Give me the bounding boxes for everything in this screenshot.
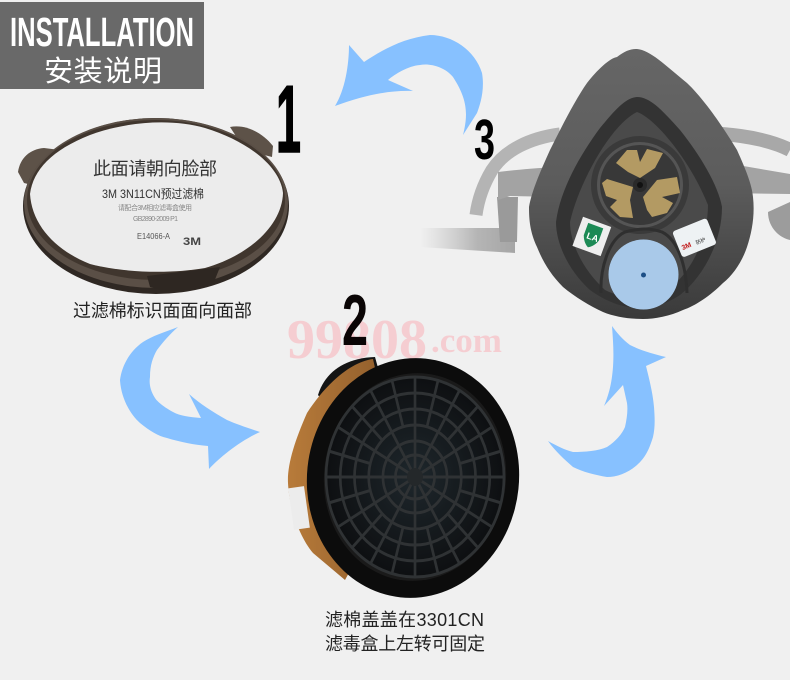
caption: step 2: 滤棉盖盖在3301CN xyxy=(325,610,484,630)
pad printing: 3M 3N11CN预过滤棉 xyxy=(102,187,204,201)
label on cartridge side xyxy=(288,486,310,530)
step number 2: 2 xyxy=(342,281,368,361)
caption: step 2: 滤毒盒上左转可固定 xyxy=(325,634,485,654)
valve frame lines xyxy=(601,229,687,293)
half-face respirator xyxy=(420,49,790,319)
step number 3: 3 xyxy=(474,108,495,172)
3M product label: 3M xyxy=(681,242,693,252)
caption: step 2 xyxy=(325,610,485,654)
cartridge xyxy=(288,348,531,608)
cartridge body xyxy=(288,359,400,580)
cartridge port with tan filter xyxy=(591,136,689,234)
LA safety label: LA xyxy=(585,231,600,244)
white pad xyxy=(30,122,283,272)
inner teardrop plate xyxy=(556,97,722,308)
watermark: .com xyxy=(431,321,502,360)
title block: 安装说明 xyxy=(44,55,162,88)
pad printing xyxy=(93,159,217,248)
LA safety label xyxy=(572,217,611,256)
disc rim xyxy=(23,118,289,294)
watermark xyxy=(287,309,502,371)
arrow: step 1 to step 2 xyxy=(120,327,260,469)
pad printing: 此面请朝向脸部 xyxy=(93,159,217,179)
grid mesh xyxy=(326,377,504,577)
title block: INSTALLATION xyxy=(10,9,194,55)
arrow: step 2 to step 3 xyxy=(548,326,666,477)
arrow: step 3 to step 1 xyxy=(335,35,483,135)
pad printing: 请配合3M相应滤毒盒使用 xyxy=(118,203,192,212)
disc tabs xyxy=(18,126,273,187)
pad printing: 3M xyxy=(183,236,201,248)
infographic canvas: 1 xyxy=(276,66,301,173)
caption: step 1: 过滤棉标识面面向面部 xyxy=(73,301,252,321)
pad printing: GB2890-2009 P1 xyxy=(133,216,178,223)
blue valve xyxy=(608,240,678,310)
title block xyxy=(0,2,204,89)
3M product label: 防护 xyxy=(695,236,707,246)
cartridge front xyxy=(295,348,531,608)
mask shell xyxy=(529,49,754,319)
pad printing: E14066-A xyxy=(137,232,171,241)
head straps xyxy=(420,134,790,253)
3M product label xyxy=(672,218,717,258)
filter cotton disc xyxy=(18,118,289,294)
bottom tab xyxy=(147,267,220,291)
watermark: 99808 xyxy=(287,309,427,371)
black cap behind band xyxy=(318,357,380,410)
